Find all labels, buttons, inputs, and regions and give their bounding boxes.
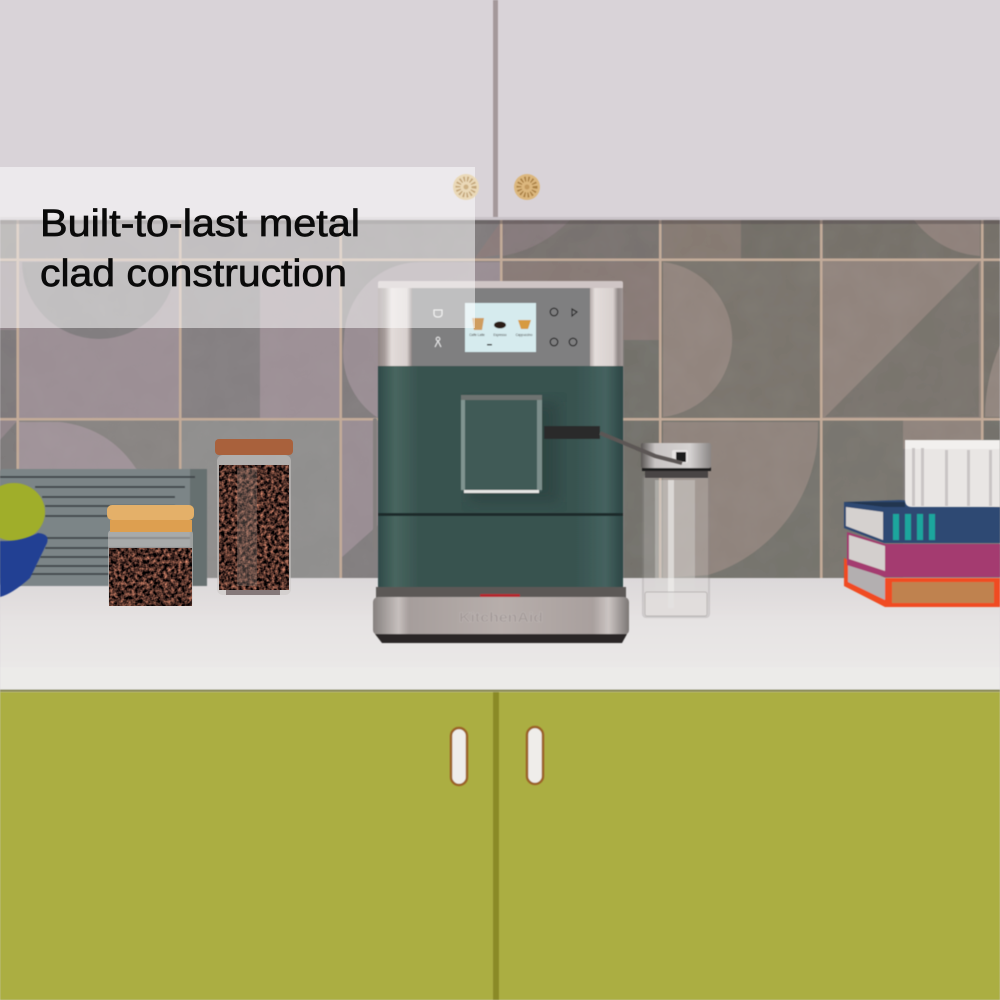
tile: gray circle on mauve [18, 259, 180, 419]
book: navy with teal stripes [844, 500, 1000, 543]
stack of books [844, 500, 1000, 607]
tile: mauve round shape behind machine [343, 262, 501, 418]
coffee spout [461, 395, 558, 502]
blue bowl [0, 533, 48, 597]
green body [378, 366, 623, 513]
tall coffee jar [215, 439, 293, 595]
caption heading: clad construction [40, 253, 347, 295]
translucent caption panel [0, 167, 475, 328]
tile: diagonal triangle [821, 259, 982, 419]
milk jug [641, 443, 711, 617]
milk connector [544, 426, 600, 439]
touch screen: Caffe Latte [469, 333, 485, 337]
upper cabinets [0, 0, 1000, 221]
knob: right [514, 174, 540, 200]
brand name: KitchenAid [459, 609, 543, 625]
drip tray front [378, 516, 623, 587]
steel base [373, 597, 629, 635]
top cap [378, 281, 623, 289]
touch screen: Espresso [493, 333, 507, 337]
tiled backsplash [0, 220, 1000, 582]
red indicator [480, 594, 520, 597]
tile: mauve half circle [660, 259, 821, 419]
tile: mauve arc lower left [18, 419, 180, 582]
knob: left [453, 174, 479, 200]
side handle [373, 418, 377, 550]
touch icons [434, 308, 577, 347]
cabinet handle: right [527, 727, 543, 784]
book: magenta [847, 532, 1000, 577]
ribbed gray stone board [0, 469, 207, 586]
caption heading: Built-to-last metal [40, 203, 360, 245]
milk tube [600, 433, 682, 463]
caption heading [40, 203, 360, 295]
marble box [905, 440, 1000, 507]
touch screen [465, 303, 536, 352]
touch screen: Cappuccino [516, 333, 533, 337]
book: orange [844, 558, 1000, 607]
countertop [0, 578, 1000, 692]
cabinet handle: left [451, 728, 467, 785]
tile: quarter circle [660, 419, 821, 582]
dark foot [375, 634, 627, 643]
lower cabinets [0, 692, 1000, 1000]
small coffee jar [107, 505, 194, 606]
apple [0, 483, 45, 541]
grout lines [0, 220, 1000, 582]
coffee machine [373, 281, 629, 643]
power strip [376, 587, 626, 598]
control head [378, 288, 623, 366]
